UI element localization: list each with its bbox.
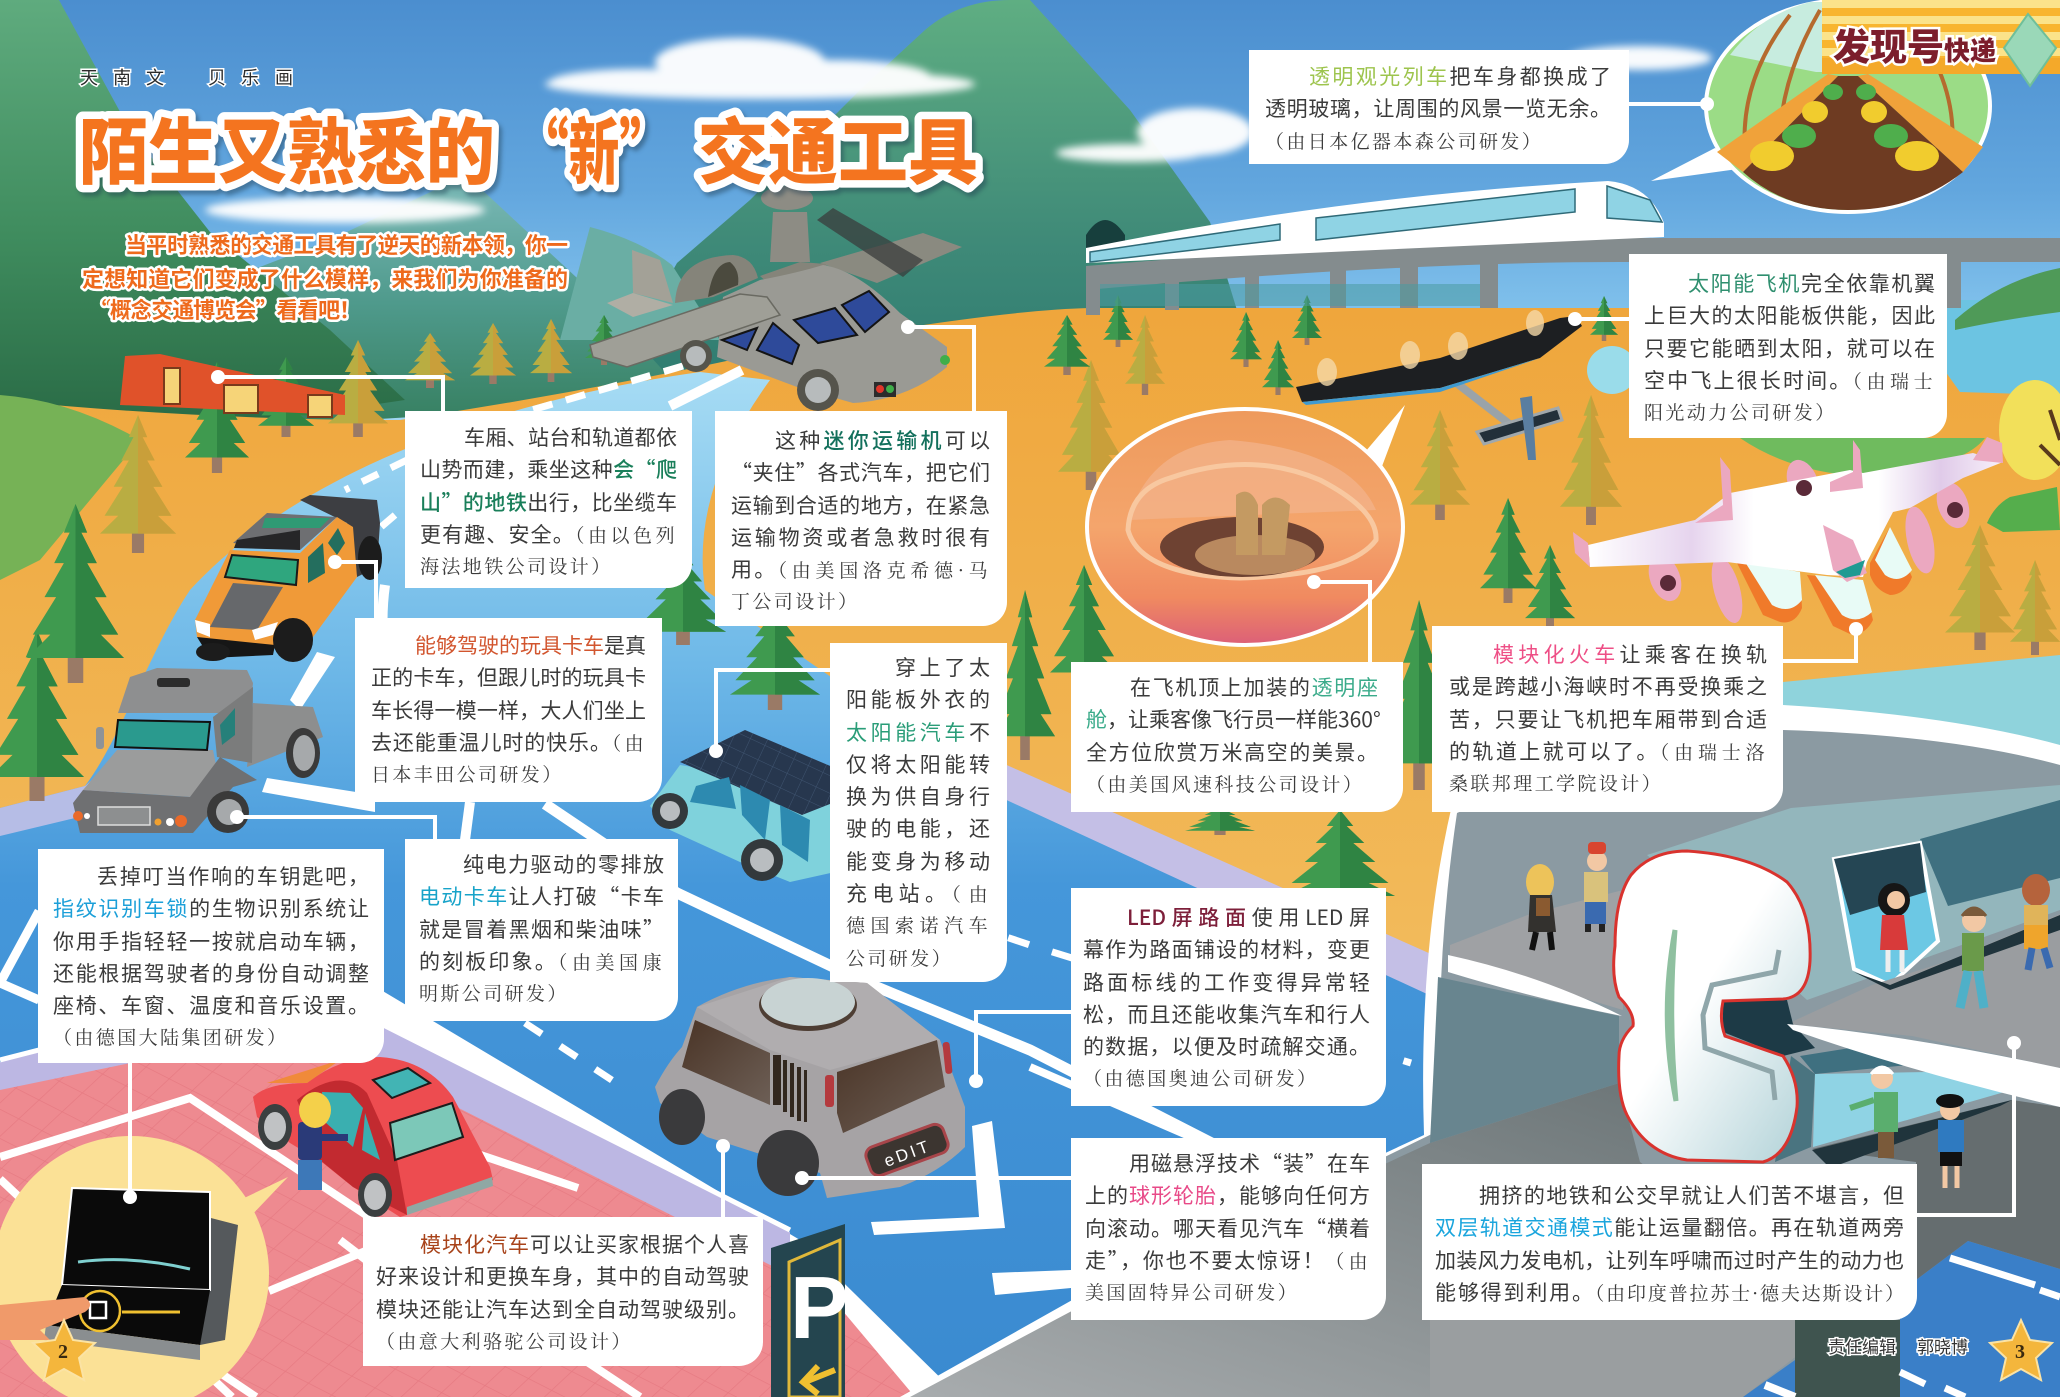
text box: mountain metro: 车厢、站台和轨道都依 xyxy=(464,422,677,452)
text box: modular train: 或是跨越小海峡时不再受换乘之 xyxy=(1449,671,1767,701)
text box: double-deck rail xyxy=(1422,1164,1917,1320)
text box: mini transporter: 运输物资或者急救时很有 xyxy=(731,522,990,552)
intro paragraph xyxy=(82,228,568,325)
text box: mountain metro: 山势而建，乘坐这种会“爬 xyxy=(420,454,677,484)
text box: toy truck: 正的卡车，但跟儿时的玩具卡 xyxy=(371,662,646,692)
pine trees xyxy=(0,295,2060,910)
solar plane xyxy=(1296,310,1582,460)
road markings xyxy=(0,366,1440,1260)
ground xyxy=(0,308,2060,980)
scenic train bridge xyxy=(1086,238,2060,315)
page number 3: 3 xyxy=(2015,1341,2025,1363)
text box: mini transporter: “夹住”各式汽车，把它们 xyxy=(731,457,990,487)
text box: mini transporter: 运输到合适的地方，在紧急 xyxy=(731,490,990,520)
text box: electric truck: 纯电力驱动的零排放 xyxy=(463,849,664,879)
text box: mountain metro: 更有趣、安全。（由以色列 xyxy=(420,519,677,549)
text box: mountain metro: 山”的地铁出行，比坐缆车 xyxy=(420,487,677,517)
text box: spherical tyres xyxy=(1071,1138,1386,1320)
text box: modular car: （由意大利骆驼公司设计） xyxy=(376,1327,633,1354)
train front capsule xyxy=(1614,851,1810,1162)
text box: fingerprint lock: 座椅、车窗、温度和音乐设置。 xyxy=(53,990,369,1020)
text box: LED road xyxy=(1071,888,1386,1106)
text box: modular train: 桑联邦理工学院设计） xyxy=(1449,769,1663,796)
passengers xyxy=(1526,842,2050,1188)
strait water xyxy=(1783,655,2060,760)
text box: mini transporter: 这种迷你运输机可以 xyxy=(775,425,990,455)
text box: solar car: 阳能板外衣的 xyxy=(846,684,990,714)
text box: solar car: 充电站。（由 xyxy=(846,878,990,908)
text box: modular car: 模块化汽车可以让买家根据个人喜 xyxy=(420,1229,749,1259)
text box: solar car xyxy=(830,643,1007,982)
text box: solar car: 穿上了太 xyxy=(895,652,990,682)
lilac road curbs xyxy=(0,760,1440,1000)
text box: transparent cockpit: 舱，让乘客像飞行员一样能360° xyxy=(1086,704,1381,734)
white road shapes xyxy=(262,652,1071,1295)
solar car xyxy=(650,730,835,882)
mountains xyxy=(0,0,1240,430)
page number 2: 2 xyxy=(58,1341,68,1363)
lower train xyxy=(1775,1056,1815,1162)
text box: electric truck: 的刻板印象。（由美国康 xyxy=(419,946,664,976)
text box: solar car: 太阳能汽车不 xyxy=(846,717,990,747)
orange toy truck xyxy=(195,495,382,662)
text box: solar plane: 只要它能晒到太阳，就可以在 xyxy=(1644,333,1935,363)
text box: double-deck rail: 能够得到利用。（由印度普拉苏士·德夫达斯设计） xyxy=(1435,1277,1904,1307)
text box: LED road: 松，而且还能收集汽车和行人 xyxy=(1083,999,1370,1029)
text box: toy truck: 能够驾驶的玩具卡车是真 xyxy=(415,630,646,660)
text box: sightseeing train: 透明玻璃，让周围的风景一览无余。 xyxy=(1265,93,1611,123)
transparent cockpit bubble xyxy=(1087,405,1405,645)
text box: electric truck: 就是冒着黑烟和柴油味” xyxy=(419,914,664,944)
text box: spherical tyres: 向滚动。哪天看见汽车“横着 xyxy=(1085,1213,1370,1243)
byline xyxy=(80,64,293,90)
green grass patches xyxy=(0,395,2060,580)
text box: sightseeing train xyxy=(1249,50,1629,164)
blue road xyxy=(0,372,1800,1397)
pond xyxy=(1587,346,1637,394)
intro paragraph: 定想知道它们变成了什么模样，来我们为你准备的 xyxy=(82,262,568,294)
text box: solar plane: 太阳能飞机完全依靠机翼 xyxy=(1688,268,1935,298)
text box: electric truck xyxy=(405,839,678,1021)
text box: mountain metro: 海法地铁公司设计） xyxy=(420,552,613,579)
text box: LED road: 幕作为路面铺设的材料，变更 xyxy=(1083,934,1370,964)
tunnel xyxy=(1086,220,1125,252)
byline: 乐 xyxy=(241,64,259,90)
text box: modular car: 好来设计和更换车身，其中的自动驾驶 xyxy=(376,1261,749,1291)
byline: 贝 xyxy=(208,64,226,90)
far lake and right hills xyxy=(1900,268,2060,440)
text box: spherical tyres: 走”，你也不要太惊讶！（由 xyxy=(1085,1245,1370,1275)
text box: modular train xyxy=(1432,626,1783,812)
text box: fingerprint lock xyxy=(38,849,384,1063)
train body xyxy=(1647,785,2060,1000)
editor credit: 郭晓博 xyxy=(1917,1333,1968,1358)
lower wall xyxy=(1430,977,1619,1143)
text box: mountain metro xyxy=(405,411,692,588)
text box: LED road: （由德国奥迪公司研发） xyxy=(1083,1064,1318,1091)
double-deck station xyxy=(900,705,2060,1397)
text box: solar plane: 空中飞上很长时间。（由瑞士 xyxy=(1644,365,1935,395)
text box: toy truck: 去还能重温儿时的快乐。（由 xyxy=(371,727,646,757)
text box: LED road: 路面标线的工作变得异常轻 xyxy=(1083,967,1370,997)
editor credit: 责任编辑 xyxy=(1828,1333,1896,1358)
modular EDIT car xyxy=(655,977,965,1198)
text box: solar car: 驶的电能，还 xyxy=(846,813,990,843)
yellow tree xyxy=(1999,380,2060,480)
text box: spherical tyres: 美国固特异公司研发） xyxy=(1085,1278,1299,1305)
text box: electric truck: 明斯公司研发） xyxy=(419,979,569,1006)
gray semi truck xyxy=(73,668,323,833)
byline: 画 xyxy=(275,64,293,90)
connector dots xyxy=(123,97,2021,1204)
sightseeing train interior bubble xyxy=(1651,0,1990,212)
byline: 文 xyxy=(146,64,164,90)
text box: solar plane: 上巨大的太阳能板供能，因此 xyxy=(1644,300,1935,330)
red mountain train xyxy=(120,354,345,417)
flying mini transporter xyxy=(590,186,962,411)
column name: 发现号快递 xyxy=(1833,17,1996,71)
clouds xyxy=(205,38,1712,223)
fingerprint lock bubble xyxy=(0,1136,288,1397)
text box: toy truck: 车长得一模一样，大人们坐上 xyxy=(371,695,646,725)
text box: solar plane xyxy=(1629,254,1947,438)
text box: solar plane: 阳光动力公司研发） xyxy=(1644,398,1837,425)
main title: 交通工具 xyxy=(698,94,978,199)
text box: spherical tyres: 上的球形轮胎，能够向任何方 xyxy=(1085,1180,1370,1210)
text box: modular car: 模块还能让汽车达到全自动驾驶级别。 xyxy=(376,1294,749,1324)
text box: solar car: 换为供自身行 xyxy=(846,781,990,811)
upper platform right xyxy=(1787,914,2060,1068)
text box: toy truck xyxy=(355,618,662,802)
text box: modular car xyxy=(363,1217,763,1366)
text box: double-deck rail: 双层轨道交通模式能让运量翻倍。再在轨道两旁 xyxy=(1435,1212,1904,1242)
text box: modular train: 的轨道上就可以了。（由瑞士洛 xyxy=(1449,736,1767,766)
sky xyxy=(0,0,2060,420)
text box: modular train: 模块化火车让乘客在换轨 xyxy=(1493,639,1767,669)
upper train door xyxy=(1834,843,1938,985)
text box: mini transporter: 丁公司设计） xyxy=(731,587,859,614)
text box: spherical tyres: 用磁悬浮技术“装”在车 xyxy=(1129,1148,1370,1178)
page number 3 xyxy=(1990,1320,2052,1380)
text box: solar car: 仅将太阳能转 xyxy=(846,749,990,779)
text box: double-deck rail: 拥挤的地铁和公交早就让人们苦不堪言，但 xyxy=(1479,1180,1904,1210)
text box: transparent cockpit: （由美国风速科技公司设计） xyxy=(1086,770,1364,797)
pink parking plaza xyxy=(0,983,915,1397)
intro paragraph: 当平时熟悉的交通工具有了逆天的新本领，你一 xyxy=(125,228,568,260)
gray road xyxy=(910,1083,1844,1397)
main title xyxy=(79,94,978,199)
text box: solar car: 德国索诺汽车 xyxy=(846,911,990,938)
text box: mini transporter xyxy=(715,411,1007,626)
text box: toy truck: 日本丰田公司研发） xyxy=(371,760,564,787)
text box: fingerprint lock: 你用手指轻轻一按就启动车辆， xyxy=(53,926,369,956)
modular train aircraft xyxy=(1573,437,2003,634)
text box: mini transporter: 用。（由美国洛克希德·马 xyxy=(731,554,990,584)
transparent sightseeing train xyxy=(1086,181,1664,263)
text box: double-deck rail: 加装风力发电机，让列车呼啸而过时产生的动力也 xyxy=(1435,1245,1904,1275)
text box: fingerprint lock: 丢掉叮当作响的车钥匙吧， xyxy=(97,861,369,891)
page number 2 xyxy=(33,1320,95,1380)
text box: fingerprint lock: 还能根据驾驶者的身份自动调整 xyxy=(53,958,369,988)
parking sign xyxy=(771,1224,849,1397)
text box: transparent cockpit: 全方位欣赏万米高空的美景。 xyxy=(1086,737,1378,767)
intro paragraph: “概念交通博览会”看看吧！ xyxy=(89,293,361,325)
text box: transparent cockpit xyxy=(1071,662,1403,812)
red car with driver xyxy=(253,1057,493,1217)
text box: solar car: 公司研发） xyxy=(846,944,953,971)
text box: LED road: 的数据，以便及时疏解交通。 xyxy=(1083,1031,1370,1061)
text box: electric truck: 电动卡车让人打破“卡车 xyxy=(419,881,664,911)
main title: “新” xyxy=(518,94,670,199)
text box: modular train: 苦，只要让飞机把车厢带到合适 xyxy=(1449,704,1767,734)
text box: fingerprint lock: （由德国大陆集团研发） xyxy=(53,1023,288,1050)
byline: 南 xyxy=(113,64,131,90)
text box: solar car: 能变身为移动 xyxy=(846,846,990,876)
white connector lines xyxy=(130,104,2014,1217)
text box: sightseeing train: （由日本亿器本森公司研发） xyxy=(1265,127,1543,154)
text box: fingerprint lock: 指纹识别车锁的生物识别系统让 xyxy=(53,893,369,923)
byline: 天 xyxy=(80,64,98,90)
letter P: P xyxy=(790,1258,849,1357)
upper platform left xyxy=(1450,890,1623,1010)
column banner xyxy=(1822,0,2060,86)
text box: transparent cockpit: 在飞机顶上加装的透明座 xyxy=(1130,672,1378,702)
main title: 陌生又熟悉的 xyxy=(79,94,495,199)
EDIT plate text: eDIT xyxy=(881,1136,934,1171)
text box: sightseeing train: 透明观光列车把车身都换成了 xyxy=(1309,61,1611,91)
text box: LED road: LED屏路面使用LED屏 xyxy=(1127,902,1370,932)
